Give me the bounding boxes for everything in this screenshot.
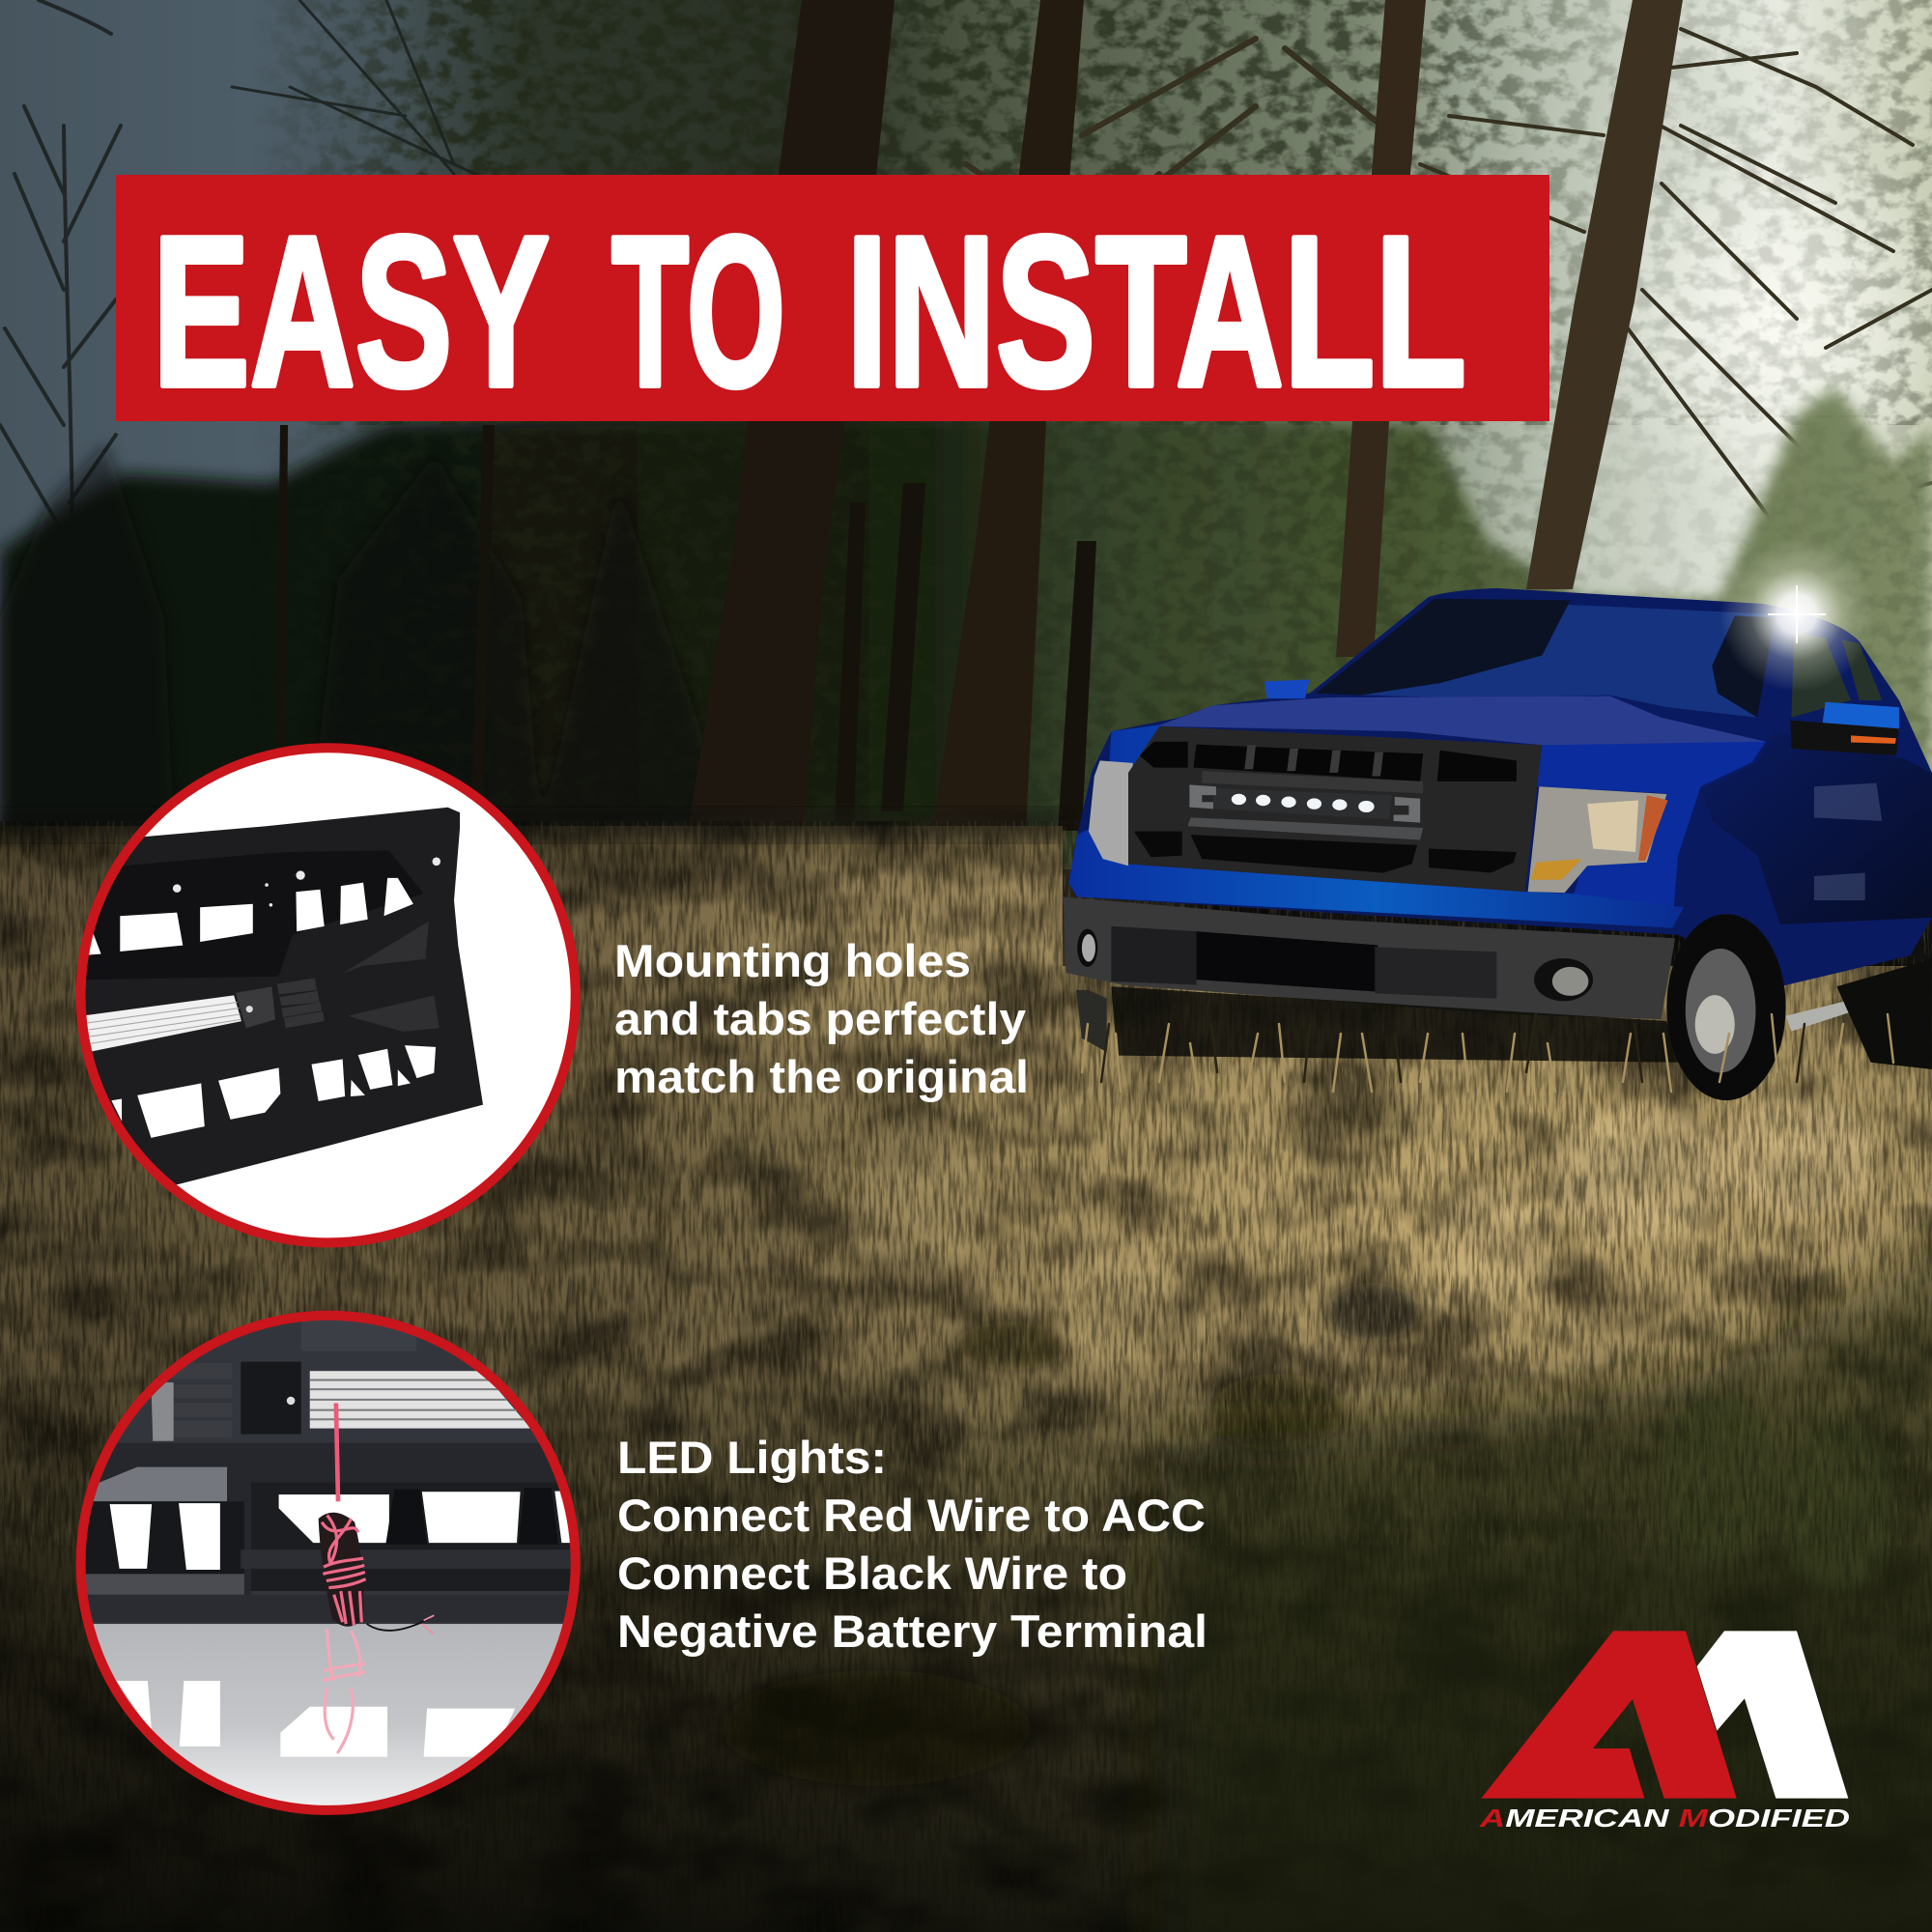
caption: LED wiring — [617, 1432, 1208, 1657]
side door — [1701, 731, 1932, 924]
front wheel — [1076, 914, 1786, 1100]
caption: mounting holes: Mounting holes — [614, 935, 971, 986]
LED bar — [1189, 784, 1420, 823]
title text: TO — [611, 192, 785, 432]
top darker band — [78, 850, 424, 980]
lower grille slots — [1134, 832, 1517, 872]
floor reflection — [78, 1624, 579, 1810]
fog lights — [1077, 929, 1593, 1001]
title text — [153, 192, 1466, 432]
truck: blue pickup with LED grille — [1064, 588, 1932, 1100]
wire coil — [319, 1513, 363, 1627]
fin details — [341, 922, 429, 975]
background: forest scene — [0, 0, 1932, 869]
mounting clips — [173, 857, 440, 907]
title banner: red — [116, 175, 1549, 421]
upper grille slots — [1140, 742, 1517, 781]
running board — [1786, 986, 1908, 1032]
caption: mounting holes — [614, 935, 1029, 1102]
door reflections — [1814, 783, 1882, 900]
LED strip — [86, 995, 242, 1052]
windshield — [1316, 599, 1775, 718]
rear wheel shadow — [1836, 959, 1932, 1069]
caption: LED wiring: Negative Battery Terminal — [617, 1605, 1208, 1657]
black wire tail — [367, 1619, 429, 1631]
underside shadow — [1111, 986, 1678, 1063]
ring — [81, 748, 576, 1242]
grille — [1128, 726, 1542, 892]
background: grass field — [0, 802, 1932, 1932]
truck body silhouette — [1068, 588, 1932, 986]
grille openings — [87, 878, 436, 1138]
grille back silhouette — [78, 808, 483, 1185]
LED mount — [241, 1362, 301, 1435]
title text: EASY — [153, 192, 550, 432]
caption: LED wiring: LED Lights: — [617, 1432, 887, 1483]
ring — [81, 1316, 576, 1810]
openings — [110, 1492, 572, 1570]
circle: LED wiring coil — [78, 1316, 579, 1810]
front bumper — [1064, 896, 1675, 1019]
foreground grass over truck wheels — [1082, 1014, 1893, 1092]
caption: LED wiring: Connect Black Wire to — [617, 1548, 1127, 1599]
circle: grille back view with mounting tabs — [78, 748, 576, 1242]
right mirror — [1790, 702, 1899, 755]
left mirror — [1264, 680, 1310, 698]
logo mark — [1481, 1631, 1848, 1799]
connector ribs — [277, 978, 325, 1028]
caption: mounting holes: match the original — [614, 1051, 1029, 1102]
right headlight — [1528, 786, 1668, 893]
right fender — [1536, 742, 1766, 924]
LED mount — [236, 986, 275, 1028]
hood — [1156, 696, 1766, 749]
wire lead — [336, 1403, 338, 1501]
title text: INSTALL — [846, 192, 1466, 432]
reflected openings — [117, 1681, 515, 1757]
windshield tree reflection — [1316, 599, 1775, 718]
side windows — [1791, 632, 1882, 718]
posts — [385, 1488, 558, 1545]
logo: American Modified — [1479, 1631, 1850, 1833]
connector ribs — [172, 1363, 232, 1437]
dark panel — [78, 1443, 579, 1595]
left headlight — [1089, 760, 1133, 866]
caption: LED wiring: Connect Red Wire to ACC — [617, 1490, 1206, 1541]
blue front panel — [1068, 724, 1684, 928]
logo wordmark: A MERICAN M ODIFIED — [1479, 1804, 1850, 1833]
caption: mounting holes: and tabs perfectly — [614, 993, 1026, 1044]
sun flare on truck roof — [1719, 537, 1874, 692]
top panel — [301, 1319, 416, 1351]
LED strip — [310, 1371, 530, 1429]
lower bumper strip — [78, 1595, 579, 1622]
